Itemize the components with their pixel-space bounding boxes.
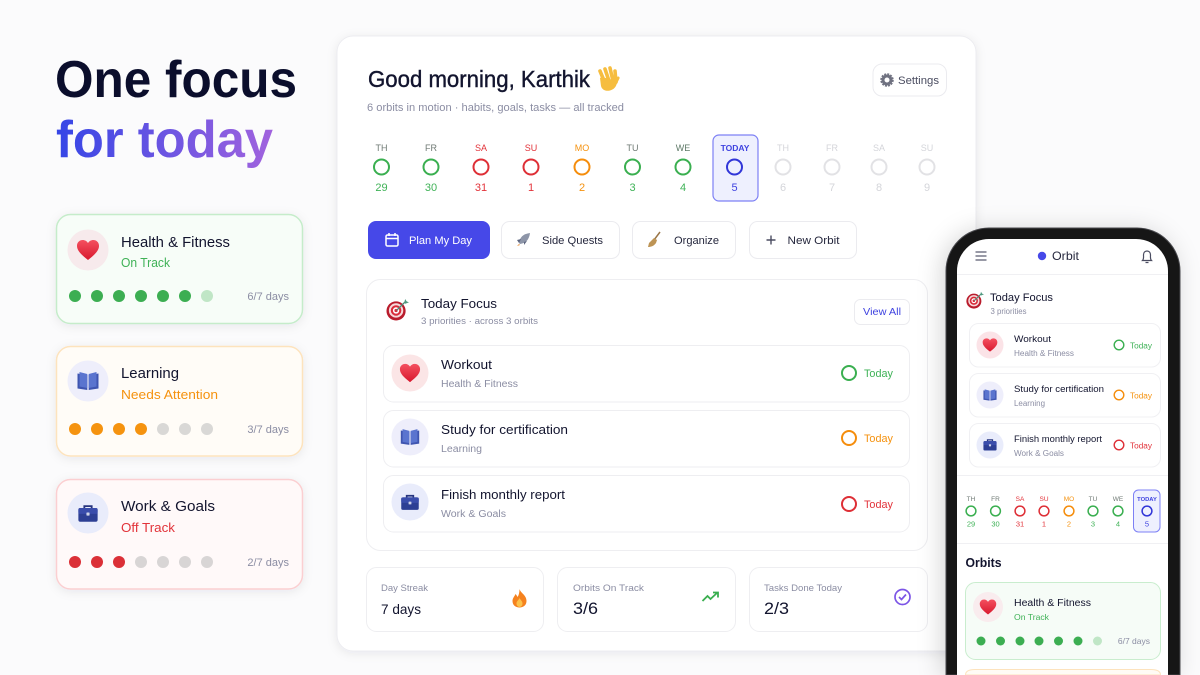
button: organize: Organize (674, 235, 719, 247)
progress dots (69, 423, 213, 435)
phone: week calendar (966, 490, 1160, 532)
week calendar strip: 3 (629, 182, 636, 194)
phone: week calendar: FR (991, 496, 1000, 503)
panel heading: Today Focus (421, 296, 498, 311)
days count: 2/7 days (247, 557, 289, 569)
phone: week calendar: SU (1039, 496, 1049, 503)
panel subheading: 3 priorities · across 3 orbits (421, 316, 538, 327)
icon: target (386, 299, 409, 321)
phone: week calendar: TU (1089, 496, 1098, 503)
task: workout: Today (864, 368, 893, 380)
icon: gear (881, 74, 893, 86)
phone: week calendar: 5 (1145, 520, 1149, 528)
week calendar strip: 31 (475, 182, 487, 194)
week calendar strip: TH (376, 143, 388, 153)
task: finish monthly report: Work & Goals (441, 509, 506, 520)
task: study for certification: Learning (441, 444, 482, 455)
task: study for certification (384, 410, 910, 467)
phone task: study: Learning (1014, 399, 1045, 408)
phone task: workout: Today (1130, 342, 1152, 350)
stat: tasks done today: Tasks Done Today (764, 583, 842, 594)
phone: today focus: Today Focus (990, 292, 1053, 304)
phone: week calendar: 30 (991, 520, 1000, 528)
icon: check circle (895, 590, 910, 604)
phone: week calendar: 31 (1016, 520, 1024, 528)
phone: week calendar: SA (1016, 496, 1025, 503)
week calendar strip: TU (626, 143, 638, 153)
stat: day streak (366, 568, 544, 632)
stat: orbits on track: 3/6 (573, 600, 598, 618)
icon: waving hand (600, 68, 620, 91)
panel: today focus (366, 280, 928, 550)
phone: health and fitness card: Health & Fitness (1014, 598, 1091, 609)
button: side quests (502, 222, 620, 258)
week calendar strip (374, 135, 934, 201)
title (55, 51, 297, 169)
button: plan my day: Plan My Day (409, 235, 472, 247)
phone: week calendar: MO (1064, 496, 1074, 503)
task: finish monthly report (384, 476, 910, 532)
icon: menu (976, 252, 986, 260)
greeting heading: Good morning, Karthik (368, 66, 590, 92)
stat: orbits on track (558, 568, 736, 632)
icon: book (68, 360, 108, 402)
phone task: report: Work & Goals (1014, 449, 1064, 458)
phone: week calendar: 29 (967, 520, 975, 528)
button: plan my day (368, 221, 490, 259)
phone: next card peek (966, 670, 1160, 675)
phone task: study (970, 374, 1160, 417)
status: Off Track (121, 521, 176, 535)
stat: tasks done today: 2/3 (764, 600, 789, 618)
phone task: workout: Health & Fitness (1014, 349, 1074, 358)
icon: heart (68, 230, 108, 270)
stat: day streak: Day Streak (381, 583, 428, 594)
card heading: Health & Fitness (121, 235, 230, 251)
phone task: workout (970, 324, 1160, 367)
panel: health and fitness summary card (56, 214, 302, 324)
button: side quests: Side Quests (542, 235, 604, 247)
week calendar strip: 7 (829, 182, 835, 194)
task: finish monthly report: Today (864, 499, 893, 511)
week calendar strip: 4 (680, 182, 686, 194)
phone: week calendar: WE (1113, 496, 1124, 503)
today highlight (713, 135, 758, 201)
week calendar strip: SU (525, 143, 537, 153)
week calendar strip: 6 (780, 182, 786, 194)
phone mockup (946, 228, 1180, 675)
button: organize (632, 222, 736, 258)
phone: health and fitness card (966, 582, 1160, 660)
status: Needs Attention (121, 388, 218, 402)
panel: learning summary card (56, 346, 302, 456)
phone: week calendar: 4 (1116, 520, 1120, 528)
phone task: report (970, 424, 1160, 467)
card heading: Learning (121, 366, 179, 382)
phone: today focus (966, 292, 1160, 467)
icon: trend arrow (702, 592, 718, 601)
week calendar strip: TH (777, 143, 789, 153)
icon: calendar (386, 233, 398, 246)
week calendar strip: SA (475, 143, 487, 153)
week calendar strip: 9 (924, 182, 930, 194)
app name (1038, 249, 1080, 263)
icon: rocket (517, 233, 530, 246)
phone: today focus: 3 priorities (990, 307, 1026, 316)
days count: 6/7 days (247, 291, 289, 303)
phone: health and fitness card: On Track (1014, 612, 1050, 622)
status: On Track (121, 256, 171, 270)
phone: health and fitness card: 6/7 days (1118, 636, 1150, 646)
icon: bell (1142, 251, 1152, 262)
icon: target (966, 292, 984, 309)
task: study for certification: Study for certification (441, 422, 568, 437)
phone task: study: Study for certification (1014, 384, 1104, 394)
card heading: Work & Goals (121, 499, 215, 515)
phone task: report: Today (1130, 442, 1152, 450)
week calendar strip: SA (873, 143, 885, 153)
phone: week calendar: TODAY (1137, 497, 1157, 503)
phone: week calendar: TH (967, 496, 976, 503)
panel: work and goals summary card (56, 480, 302, 589)
phone task: study: Today (1130, 392, 1152, 400)
week calendar strip: FR (826, 143, 838, 153)
week calendar strip: TODAY (721, 143, 750, 153)
panel: main dashboard (337, 36, 976, 651)
week calendar strip: 29 (375, 182, 388, 194)
phone header (976, 249, 1152, 263)
week calendar strip: 8 (876, 182, 882, 194)
button: settings: Settings (898, 75, 940, 87)
icon: flame (512, 589, 526, 608)
task: workout: Health & Fitness (441, 379, 518, 390)
task: workout (384, 346, 910, 402)
app name: Orbit (1052, 249, 1080, 263)
phone task: report: Finish monthly report (1014, 434, 1103, 444)
week calendar strip: 5 (731, 182, 738, 194)
button: view all: View All (863, 307, 901, 318)
progress dots (69, 556, 213, 568)
icon: broom (648, 232, 660, 247)
phone task: workout: Workout (1014, 334, 1052, 344)
week calendar strip: SU (921, 143, 933, 153)
week calendar strip: FR (425, 143, 437, 153)
button: view all (854, 300, 910, 324)
button: settings (873, 64, 946, 96)
week calendar strip: WE (676, 143, 690, 153)
phone: week calendar: 2 (1067, 520, 1071, 528)
phone: orbits heading: Orbits (966, 556, 1002, 570)
days count: 3/7 days (247, 424, 289, 436)
task: study for certification: Today (864, 433, 893, 445)
stat: orbits on track: Orbits On Track (573, 583, 644, 594)
week calendar strip: 30 (425, 182, 437, 194)
icon: plus (766, 236, 776, 244)
task: finish monthly report: Finish monthly report (441, 487, 565, 502)
title: One focus (55, 51, 297, 109)
stat: day streak: 7 days (381, 601, 421, 617)
phone: week calendar: 3 (1091, 520, 1095, 528)
title: for today (56, 111, 273, 169)
week calendar strip: 1 (528, 182, 534, 194)
button: new orbit: New Orbit (788, 235, 840, 247)
week calendar strip: MO (575, 143, 589, 153)
stat: tasks done today (750, 568, 928, 632)
week calendar strip: 2 (579, 182, 585, 194)
task: workout: Workout (441, 357, 492, 372)
icon: briefcase (68, 492, 108, 534)
button: new orbit (750, 222, 856, 258)
phone: week calendar: 1 (1042, 520, 1046, 528)
subheading: 6 orbits in motion · habits, goals, tasks — all tracked (367, 102, 624, 114)
progress dots (69, 290, 213, 302)
